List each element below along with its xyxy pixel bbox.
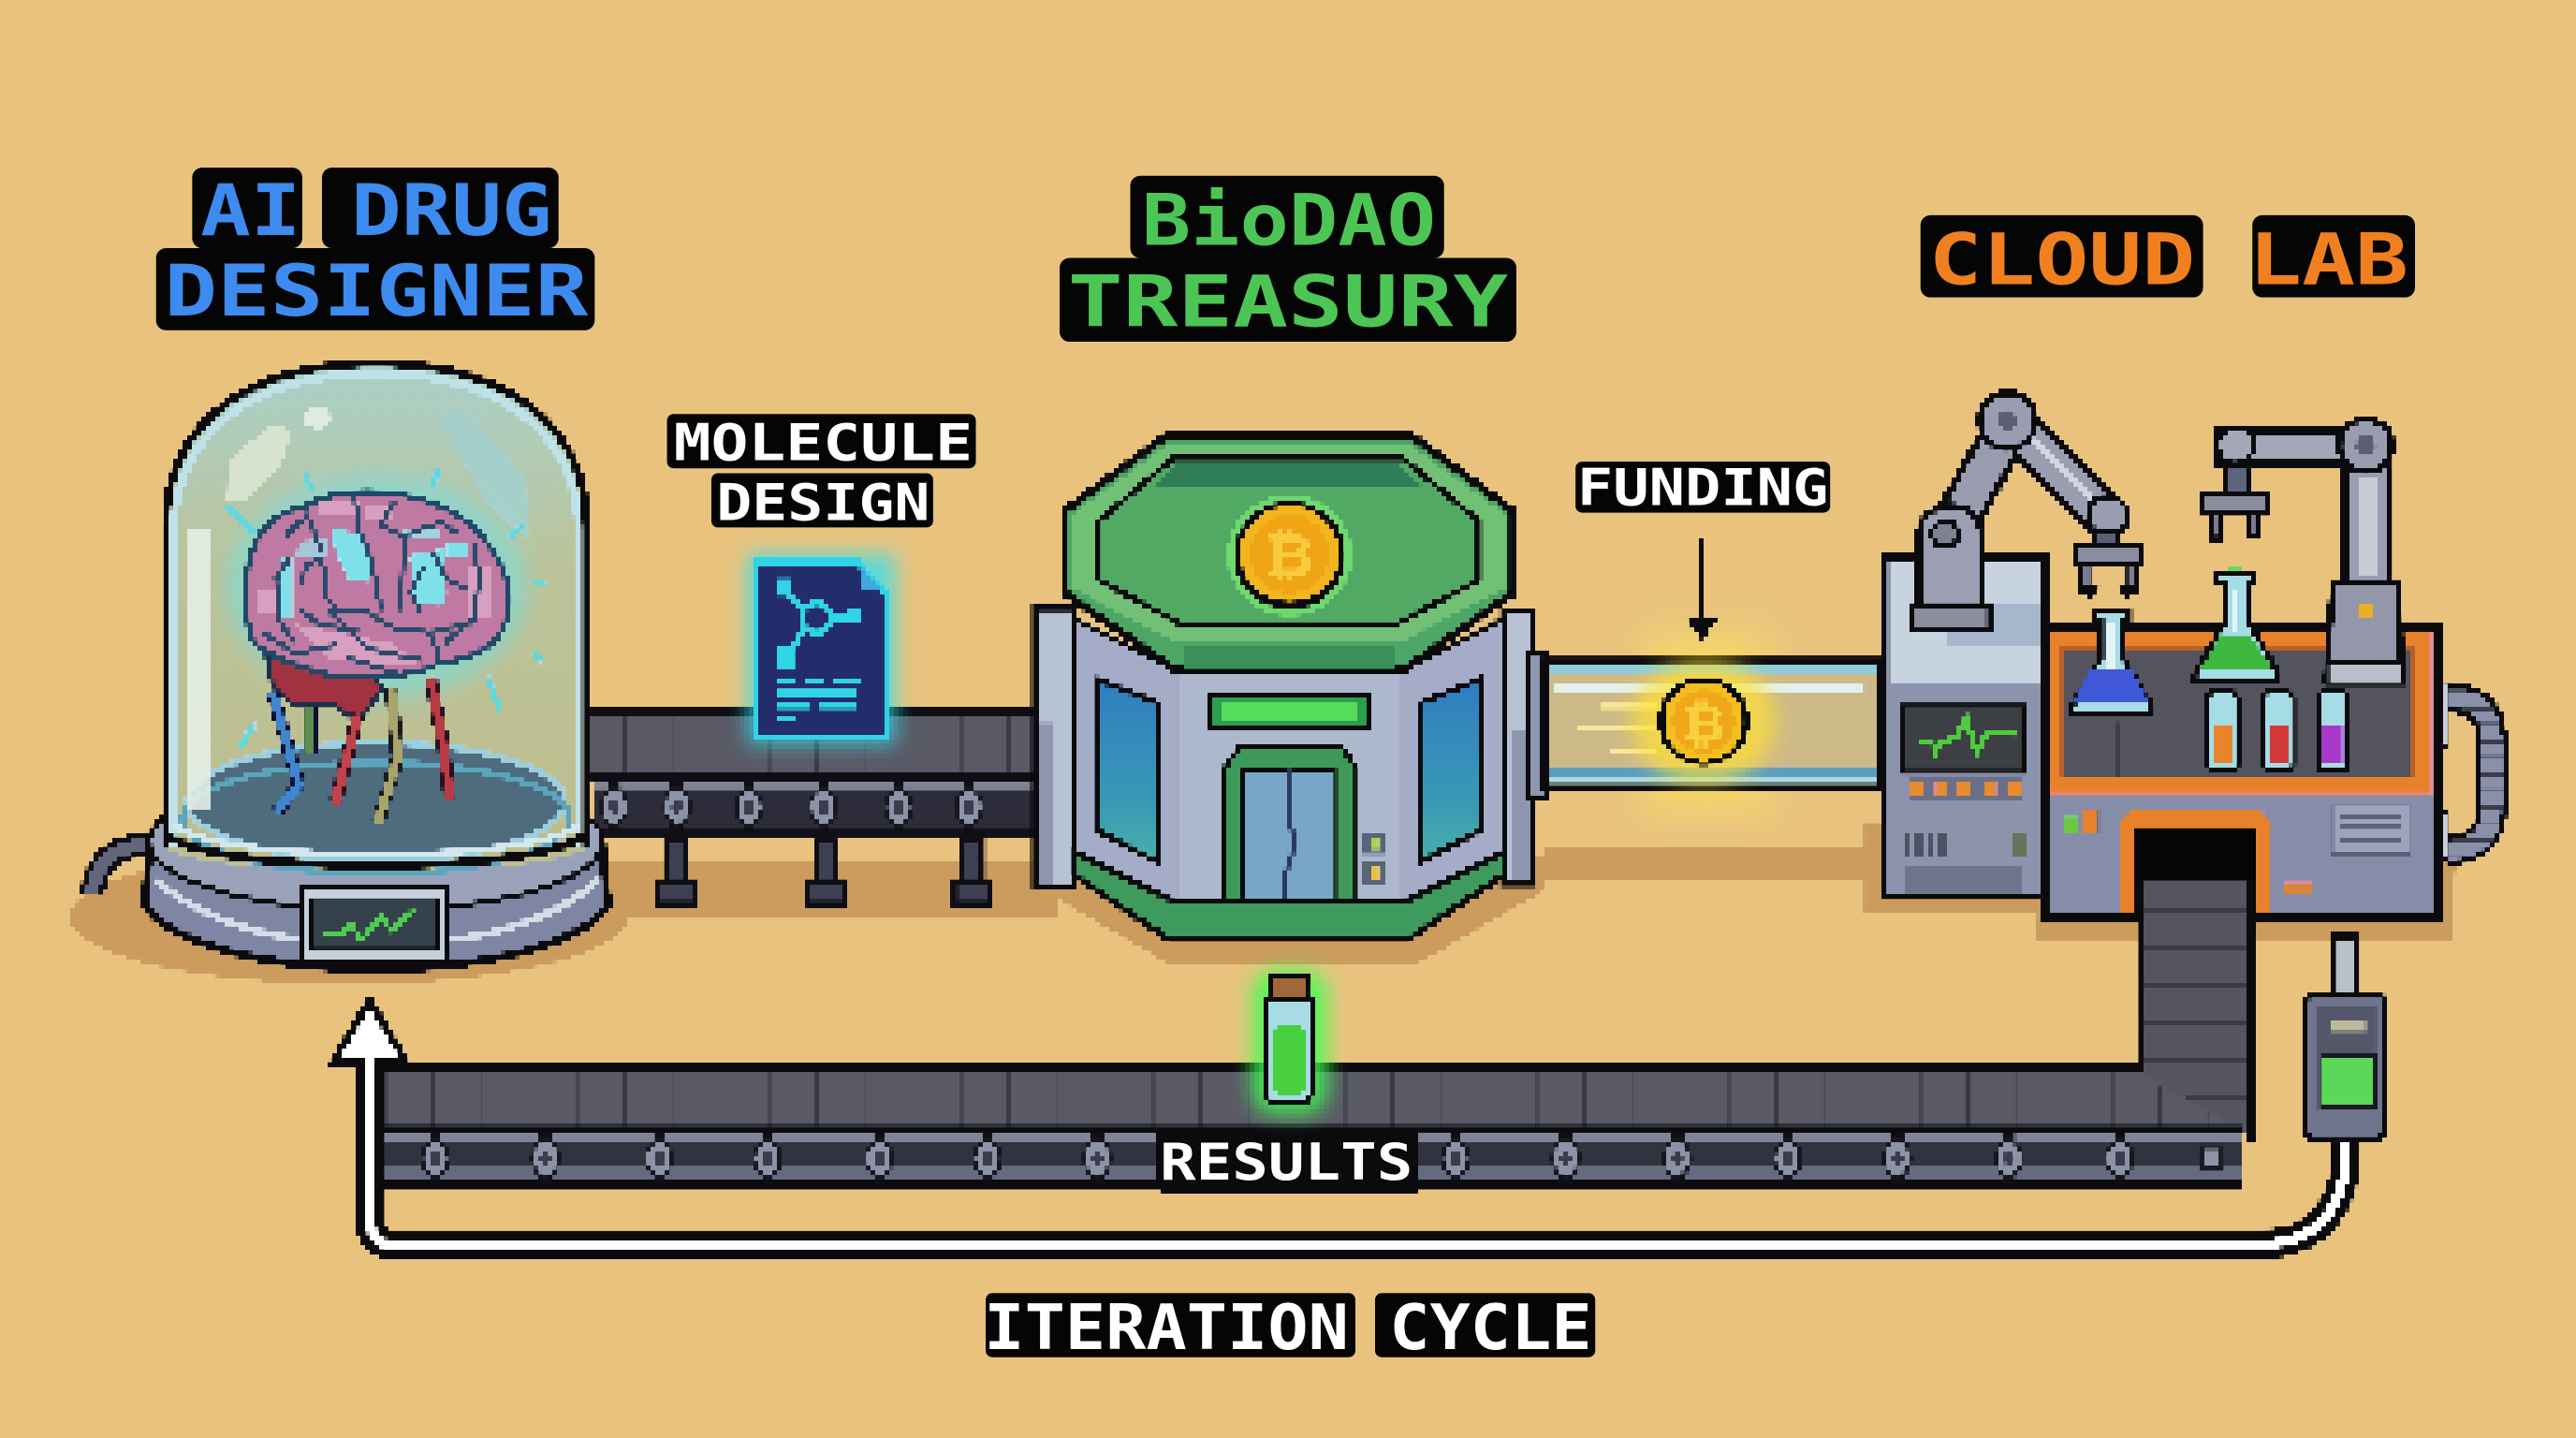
title: AI drug designer — [156, 168, 594, 332]
panel: AI drug designer dome — [92, 363, 607, 970]
green flask — [2195, 565, 2278, 682]
title: BioDAO treasury — [1060, 176, 1516, 343]
door — [1224, 748, 1357, 901]
title: AI drug designer: AI DRUG — [200, 169, 552, 252]
platform — [187, 742, 565, 861]
robot arm right — [2203, 419, 2405, 683]
blue flask — [2071, 611, 2152, 713]
label: iteration cycle: ITERATION CYCLE — [984, 1291, 1592, 1364]
base — [144, 835, 607, 970]
moving coin — [1658, 677, 1749, 766]
brain lighter patches — [256, 501, 490, 666]
icon: molecule document — [748, 553, 896, 744]
right window — [1419, 679, 1482, 862]
dome outline — [166, 363, 587, 848]
indicator lights — [2063, 810, 2313, 894]
title: cloud lab: CLOUD LAB — [1928, 219, 2408, 301]
roof coin: ₿ — [1266, 522, 1313, 588]
wires — [272, 677, 450, 823]
body — [1073, 618, 1505, 901]
control buttons — [1909, 779, 2024, 800]
test tubes — [2208, 692, 2348, 770]
robot arm left — [1910, 392, 2141, 629]
arrow: funding — [1686, 539, 1719, 640]
conveyor end cap — [2202, 1147, 2223, 1170]
label: funding: FUNDING — [1577, 459, 1828, 518]
legs — [659, 838, 990, 903]
label: molecule design: DESIGN — [716, 473, 929, 532]
rollers — [420, 1132, 2134, 1184]
brain — [245, 492, 509, 678]
all text labels — [156, 168, 2415, 1364]
base — [1073, 851, 1505, 940]
right vent — [2331, 805, 2410, 853]
brain glow — [225, 477, 527, 700]
title: BioDAO treasury: BioDAO — [1142, 180, 1436, 262]
side cable — [2445, 697, 2493, 851]
glass dome — [166, 363, 587, 872]
cerebellum — [266, 655, 381, 723]
green sign — [1211, 695, 1368, 729]
roof — [1064, 435, 1513, 670]
brain folds — [263, 496, 479, 674]
title: AI drug designer: DESIGNER — [165, 250, 589, 332]
speed lines — [1579, 703, 1658, 754]
base monitor — [300, 888, 448, 961]
front wall — [1178, 670, 1398, 901]
side caps — [1035, 608, 1533, 888]
panel: BioDAO treasury building — [1035, 435, 1533, 940]
brain cyan highlights — [279, 527, 470, 618]
sensor device — [2305, 936, 2385, 1138]
moving coin: ₿ — [1683, 696, 1724, 753]
return conveyor — [385, 882, 2250, 1191]
conveyor: design to treasury — [583, 708, 1060, 903]
panel: cloud lab machine — [1884, 392, 2493, 918]
rollers — [600, 781, 984, 833]
vents — [1904, 831, 2026, 892]
glass highlights — [227, 424, 292, 501]
results backing — [1157, 1129, 1419, 1193]
lab main unit — [2045, 626, 2438, 918]
label: molecule design: MOLECULE — [674, 413, 973, 472]
left cabinet — [1884, 557, 2045, 897]
label: results: RESULTS — [1160, 1133, 1412, 1192]
vertical belt section — [2141, 882, 2250, 1134]
hose — [92, 845, 157, 896]
label: molecule design — [667, 413, 976, 532]
sparks — [227, 466, 546, 748]
door buttons — [1364, 831, 1385, 884]
funding tube — [1530, 633, 1880, 814]
lab monitor — [1904, 707, 2023, 772]
iteration cycle arrow — [326, 992, 2346, 1244]
roof coin — [1227, 494, 1352, 616]
green result test tube — [1251, 970, 1327, 1114]
title: BioDAO treasury: TREASURY — [1068, 260, 1509, 343]
ground shadows — [69, 822, 2456, 984]
lab opening — [2121, 810, 2271, 916]
left window — [1096, 679, 1158, 862]
